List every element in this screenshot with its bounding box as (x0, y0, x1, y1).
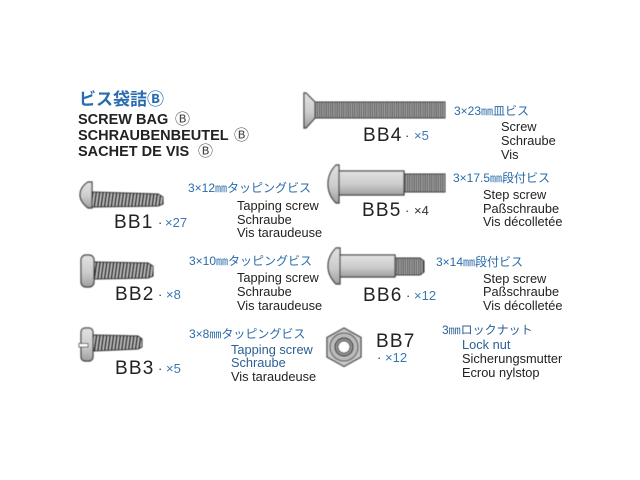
label: BB6 quantity: BB6 (363, 285, 403, 306)
label: BB7 quantity: · (377, 350, 381, 365)
text: BB7 description: Ecrou nylstop (462, 365, 540, 380)
text: BB6 description (436, 254, 562, 313)
heading: German: Ⓑ (234, 127, 249, 144)
icon: BB7 lock nut (327, 328, 361, 366)
heading: French: Ⓑ (198, 143, 213, 160)
text: BB1 description: Tapping screw (237, 198, 320, 213)
heading: German: SCHRAUBENBEUTEL (78, 128, 229, 144)
label: BB5 quantity: · (405, 203, 409, 218)
text: BB2 description: 3×10㎜タッピングビス (189, 254, 312, 268)
heading: English: Ⓑ (175, 111, 190, 128)
text: BB4 description: 3×23㎜皿ビス (454, 104, 529, 118)
text: BB1 description: 3×12㎜タッピングビス (188, 181, 311, 195)
text: BB6 description: 3×14㎜段付ビス (436, 254, 523, 269)
icon: BB6 step screw (328, 248, 424, 284)
label: BB3 quantity (115, 358, 181, 379)
text: BB3 description (189, 327, 316, 384)
label: BB1 quantity: ×27 (165, 215, 187, 230)
text: BB6 description: Vis décolletée (483, 298, 562, 313)
text: BB5 description: 3×17.5㎜段付ビス (453, 170, 550, 185)
text: BB7 description: 3㎜ロックナット (442, 323, 533, 337)
label: BB5 quantity: ×4 (414, 203, 429, 218)
label: BB6 quantity: ×12 (414, 288, 436, 303)
text: BB5 description (453, 170, 562, 229)
icon: BB5 step screw (328, 165, 445, 203)
label: BB3 quantity: ×5 (166, 361, 181, 376)
text: BB1 description: Vis taraudeuse (237, 225, 322, 240)
label: BB7 quantity: ×12 (385, 350, 407, 365)
icon: BB1 tapping screw (80, 182, 163, 208)
text: BB5 description: Paßschraube (483, 201, 559, 216)
label: BB2 quantity: BB2 (115, 284, 155, 305)
text: BB5 description: Step screw (483, 187, 547, 202)
text: BB3 description: 3×8㎜タッピングビス (189, 327, 305, 341)
text: BB4 description: Vis (501, 147, 519, 162)
label: BB7 quantity: BB7 (376, 331, 416, 352)
heading: Japanese title: ビス袋詰Ⓑ (79, 89, 164, 109)
text: BB2 description: Tapping screw (237, 270, 320, 285)
label: BB5 quantity: BB5 (362, 200, 402, 221)
label: BB4 quantity: · (405, 128, 409, 143)
icon: BB2 tapping screw (81, 255, 153, 287)
heading: French: SACHET DE VIS (78, 144, 190, 160)
label: BB2 quantity: ×8 (166, 287, 181, 302)
label: BB2 quantity: · (158, 287, 162, 302)
label: BB4 quantity: BB4 (363, 125, 403, 146)
text: BB4 description: Screw (501, 119, 537, 134)
icon: BB4 countersunk screw (304, 93, 445, 128)
text: BB5 description: Vis décolletée (483, 214, 562, 229)
text: BB7 description: Lock nut (462, 337, 511, 352)
label: BB5 quantity (362, 200, 429, 221)
label: BB6 quantity: · (406, 288, 410, 303)
label: BB1 quantity (114, 212, 187, 233)
text: BB4 description (454, 104, 556, 162)
label: BB4 quantity (363, 125, 429, 146)
text: BB7 description (442, 323, 563, 380)
text: BB1 description (188, 181, 322, 240)
text: BB2 description: Schraube (237, 284, 292, 299)
text: BB3 description: Tapping screw (231, 342, 314, 357)
title block: screw bag (78, 89, 249, 160)
text: BB7 description: Sicherungsmutter (462, 351, 563, 366)
text: BB2 description: Vis taraudeuse (237, 298, 322, 313)
label: BB3 quantity: BB3 (115, 358, 155, 379)
label: BB4 quantity: ×5 (414, 128, 429, 143)
label: BB1 quantity: BB1 (114, 212, 154, 233)
text: BB6 description: Paßschraube (483, 284, 559, 299)
text: BB6 description: Step screw (483, 271, 547, 286)
icon: BB3 tapping screw (79, 328, 142, 361)
label: BB1 quantity: · (158, 215, 162, 230)
label: BB3 quantity: · (158, 361, 162, 376)
heading: English: SCREW BAG (78, 112, 168, 128)
label: BB2 quantity (115, 284, 181, 305)
label: BB7 quantity (376, 331, 416, 365)
label: BB6 quantity (363, 285, 436, 306)
text: BB3 description: Vis taraudeuse (231, 369, 316, 384)
text: BB1 description: Schraube (237, 212, 292, 227)
text: BB4 description: Schraube (501, 133, 556, 148)
text: BB3 description: Schraube (231, 355, 286, 370)
text: BB2 description (189, 254, 322, 313)
